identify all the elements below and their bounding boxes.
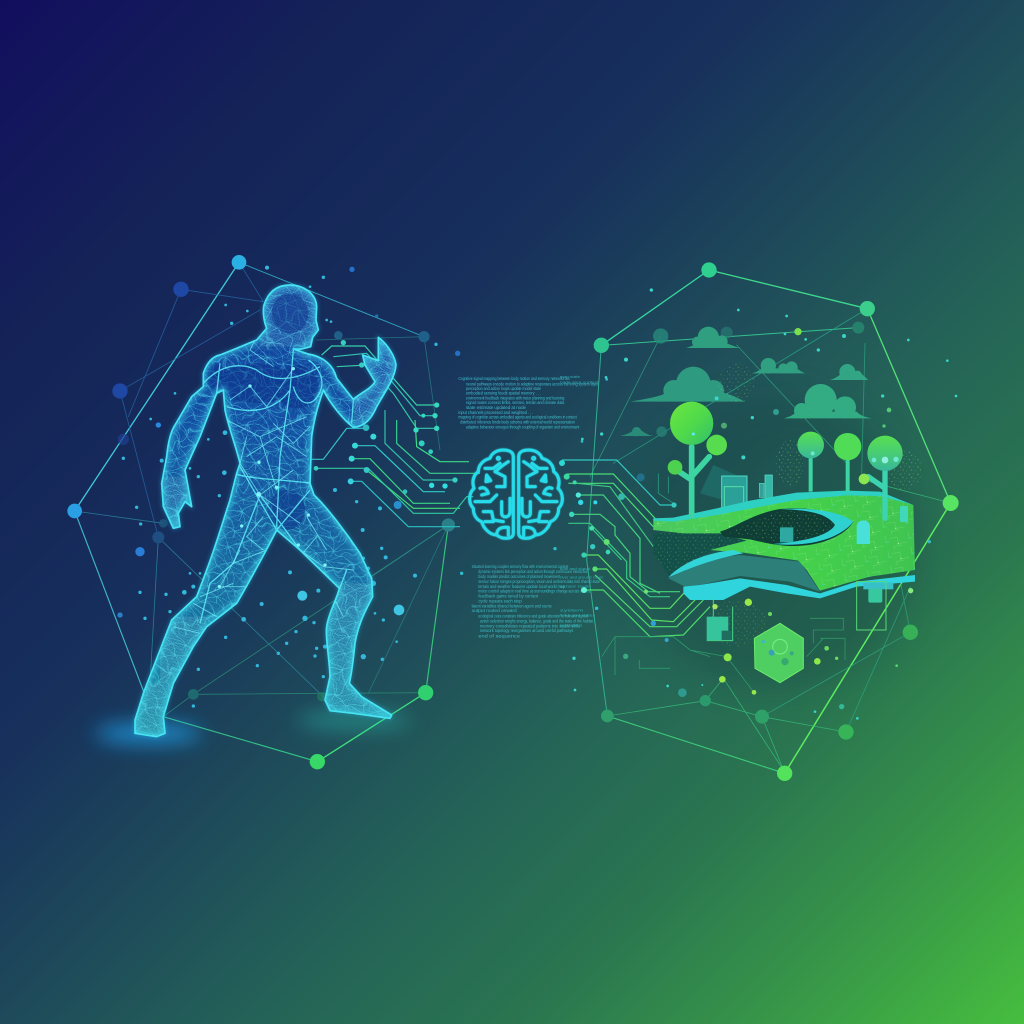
data text block bottom: network topology reorganises around useful pathways bbox=[480, 628, 574, 633]
tree: right group bbox=[692, 432, 903, 518]
land surface bbox=[653, 493, 915, 591]
clouds bbox=[620, 327, 872, 436]
data text block bottom: cycle repeats each step bbox=[478, 598, 522, 603]
data text block bottom: ecological cues constrain inference and guide attention to relevant signals bbox=[478, 613, 589, 618]
trees bbox=[668, 402, 903, 518]
land dark speck fill bbox=[653, 530, 750, 577]
foot glow left bbox=[95, 724, 202, 743]
lower river bbox=[683, 575, 915, 600]
data text block bottom: feedback gains tuned by context bbox=[478, 593, 539, 598]
speck clusters bbox=[707, 363, 922, 647]
data text block top: embodied sensing feeds spatial memory . . . bbox=[466, 391, 541, 396]
side data text fragments: map state bbox=[560, 374, 581, 379]
inner edge glow bbox=[135, 285, 396, 737]
left network nodes bbox=[67, 255, 455, 769]
cloud: low left bbox=[620, 427, 653, 436]
data text block bottom: end of sequence bbox=[478, 633, 520, 638]
side data text fragments: updated. bbox=[560, 623, 583, 628]
panel: environment network bbox=[559, 262, 959, 781]
data text block bottom: latent variables shared between agent and scene bbox=[472, 603, 552, 608]
land strata bbox=[668, 555, 820, 592]
data text block top: adaptive behaviour emerges through coupling of organism and environment bbox=[466, 424, 580, 429]
upper river bbox=[668, 550, 743, 577]
foot glow right bbox=[297, 711, 410, 729]
body mesh bbox=[136, 286, 396, 736]
data text block bottom bbox=[472, 564, 600, 638]
darker chest and waist tint bbox=[207, 293, 318, 530]
circuit trace endpoints bbox=[314, 340, 458, 494]
data text block top: signal routes connect limbs, senses, terrain and climate data bbox=[466, 400, 565, 405]
data text block bottom: action selection weighs energy, balance, goals and the state of the habitat bbox=[480, 618, 594, 623]
warped mesh layers bbox=[136, 286, 395, 736]
circuit traces from brain bbox=[562, 460, 845, 692]
panel: central data text bbox=[458, 376, 608, 638]
land circuit texture bbox=[654, 496, 915, 589]
right particle cloud bbox=[572, 288, 957, 720]
data text block bottom: sensor fusion merges proprioception, vision and ambient data into shared state bbox=[478, 579, 600, 584]
left particle cloud bbox=[117, 266, 460, 708]
trace endpoints bbox=[559, 460, 677, 642]
body glow bbox=[135, 285, 396, 737]
cloud: large right bbox=[784, 384, 872, 418]
human figure bbox=[132, 282, 400, 739]
brain right hemisphere bbox=[519, 450, 562, 538]
lower circuit blocks bbox=[707, 582, 886, 641]
land top edge bbox=[653, 491, 913, 522]
body outline bbox=[135, 285, 396, 737]
hexagon chip bbox=[754, 623, 803, 683]
panel: human figure network bbox=[67, 255, 480, 769]
floating land bbox=[650, 490, 917, 600]
cloud: upper centre bbox=[686, 327, 740, 348]
data text block top: perception and action loops update model state bbox=[466, 386, 541, 391]
data text block bottom: motor control adapts in real time as surroundings change across scales bbox=[478, 588, 590, 593]
data text block top bbox=[458, 376, 599, 429]
land dark underside bbox=[653, 530, 750, 577]
data text block bottom: output routed onward bbox=[472, 608, 517, 613]
side data text fragments: links and states bbox=[560, 613, 595, 618]
side data text fragments: node area context bbox=[560, 379, 599, 384]
side data text fragments bbox=[560, 374, 604, 628]
lake rim bbox=[773, 509, 853, 545]
side data text fragments: river and ground cover bbox=[560, 574, 604, 579]
right network lines bbox=[587, 270, 951, 773]
data text block bottom: dynamic systems link perception and action through continuous interaction bbox=[478, 569, 589, 574]
icon: brain bbox=[470, 450, 562, 538]
data text block top: environment feedback integrates with motor planning and learning bbox=[466, 395, 565, 400]
data text block bottom: Situated learning couples sensory flow with environmental context bbox=[472, 564, 569, 569]
data text block top: neural pathways encode motion to adaptive responses across the living system layer bbox=[466, 381, 599, 386]
land features bbox=[857, 520, 870, 544]
data text block bottom: terrain and weather features update local world map bbox=[478, 584, 565, 589]
city buildings bbox=[700, 465, 772, 511]
lake specks bbox=[727, 511, 835, 542]
data text block top: input channels processed and weighted . . . bbox=[458, 410, 533, 415]
left network lines bbox=[75, 262, 448, 762]
body mesh joints bbox=[218, 367, 327, 588]
cloud: upper right small bbox=[752, 358, 805, 373]
data text block bottom: body models predict outcomes of planned movement bbox=[478, 574, 561, 579]
brain left hemisphere bbox=[470, 450, 513, 538]
data text block top: mapping of cognition across embodied agents and ecological conditions in context bbox=[458, 415, 577, 420]
data text block top: distributed inference binds body schema with external world representation bbox=[460, 419, 575, 424]
data text block top: Cognitive signal mapping between body motion and sensory networks arc bbox=[458, 376, 570, 381]
scene shadow bbox=[633, 397, 920, 690]
side data text fragments: system bbox=[560, 608, 585, 613]
side data text fragments: sensor route bbox=[560, 583, 591, 588]
right network nodes bbox=[594, 262, 959, 781]
dense mesh areas bbox=[127, 283, 400, 743]
central particles bbox=[460, 378, 608, 610]
muscle contour lines bbox=[200, 350, 353, 623]
side data text fragments: flow and signal bbox=[560, 566, 590, 571]
large mesh facets bbox=[173, 330, 353, 633]
data text block bottom: memory consolidates repeated patterns into stable skills bbox=[480, 623, 581, 628]
cloud: large left bbox=[630, 367, 745, 402]
lake bbox=[720, 508, 853, 546]
circuit traces to brain bbox=[312, 346, 480, 527]
data text block top: state estimate updated at node bbox=[466, 405, 526, 410]
tree: large left bbox=[668, 402, 727, 515]
cloud: far right small bbox=[830, 364, 868, 380]
